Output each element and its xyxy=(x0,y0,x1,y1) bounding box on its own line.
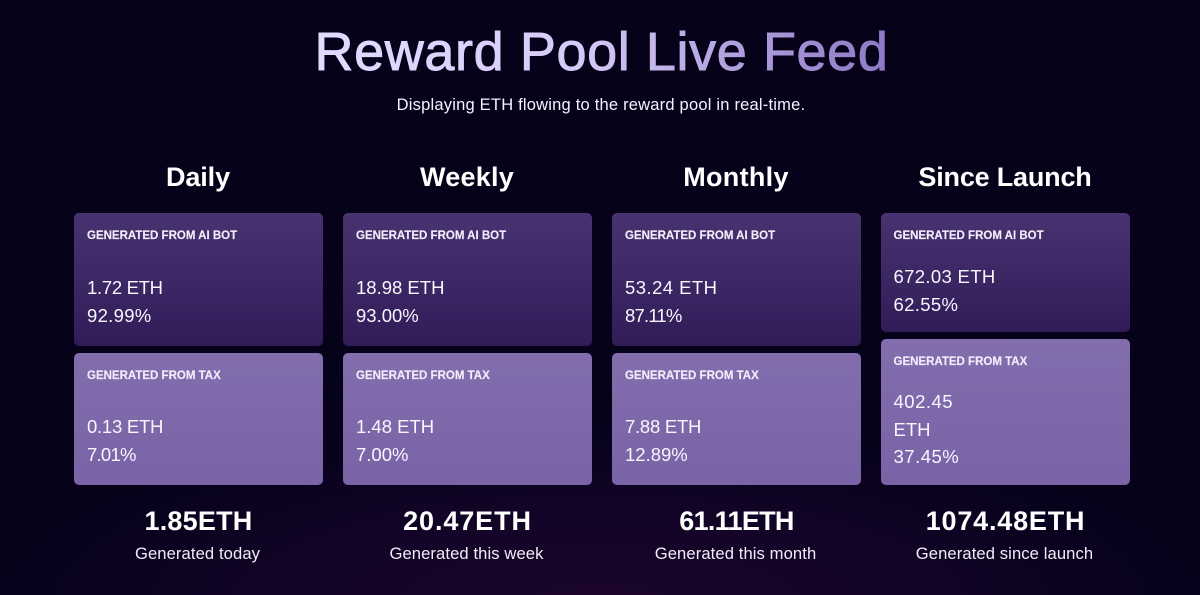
total: monthly: 61.11ETH xyxy=(679,506,794,536)
card: weekly tax: GENERATED FROM TAX xyxy=(356,370,490,382)
card: since launch AI bot: 672.03 ETH xyxy=(894,266,996,287)
card: monthly tax: GENERATED FROM TAX xyxy=(625,370,759,382)
total: daily: 1.85ETH xyxy=(145,506,252,536)
card: daily AI bot xyxy=(74,213,323,346)
heading: since launch: Since Launch xyxy=(918,162,1092,192)
panel: weekly xyxy=(343,162,592,563)
card: weekly tax: 7.00% xyxy=(356,444,408,464)
card: since launch tax: 37.45% xyxy=(894,446,959,467)
card: since launch AI bot: 62.55% xyxy=(894,294,958,314)
card: since launch AI bot xyxy=(881,213,1130,332)
caption: weekly: Generated this week xyxy=(389,544,544,563)
panel: daily xyxy=(74,162,323,563)
caption: daily: Generated today xyxy=(135,544,260,563)
card: since launch AI bot: GENERATED FROM AI BOT xyxy=(894,230,1044,242)
card: daily tax: 0.13 ETH xyxy=(87,416,163,437)
subtitle: Displaying ETH flowing to the reward pool in real-time. xyxy=(397,96,805,114)
total: since launch: 1074.48ETH xyxy=(926,506,1085,536)
title: Reward Pool Live Feed xyxy=(315,22,888,82)
card: weekly AI bot: 93.00% xyxy=(356,304,419,326)
card: daily AI bot: 1.72 ETH xyxy=(87,277,163,298)
card: monthly tax xyxy=(612,353,861,485)
card: weekly tax xyxy=(343,353,592,485)
card: daily AI bot: GENERATED FROM AI BOT xyxy=(87,230,237,242)
card: since launch tax xyxy=(881,339,1130,485)
card: since launch tax: ETH xyxy=(894,418,930,440)
card: weekly AI bot: GENERATED FROM AI BOT xyxy=(356,230,506,242)
caption: monthly: Generated this month xyxy=(655,544,816,563)
total: weekly: 20.47ETH xyxy=(403,506,532,536)
card: daily AI bot: 92.99% xyxy=(87,304,152,326)
card: weekly tax: 1.48 ETH xyxy=(356,416,434,437)
card: daily tax: 7.01% xyxy=(87,444,136,464)
heading: daily: Daily xyxy=(166,162,230,192)
card: monthly AI bot: 87.11% xyxy=(625,304,682,326)
panel: since launch xyxy=(881,162,1130,563)
card: daily tax xyxy=(74,353,323,485)
card: monthly tax: 12.89% xyxy=(625,444,688,464)
card: daily tax: GENERATED FROM TAX xyxy=(87,370,221,382)
card: since launch tax: GENERATED FROM TAX xyxy=(894,356,1027,368)
heading: monthly: Monthly xyxy=(683,162,789,192)
card: monthly tax: 7.88 ETH xyxy=(625,416,701,437)
heading: weekly: Weekly xyxy=(420,162,514,192)
caption: since launch: Generated since launch xyxy=(916,544,1093,563)
panel: monthly xyxy=(612,162,861,563)
card: monthly AI bot xyxy=(612,213,861,346)
card: weekly AI bot: 18.98 ETH xyxy=(356,277,444,298)
card: monthly AI bot: 53.24 ETH xyxy=(625,277,718,298)
card: monthly AI bot: GENERATED FROM AI BOT xyxy=(625,230,775,242)
card: weekly AI bot xyxy=(343,213,592,346)
card: since launch tax: 402.45 xyxy=(894,391,953,412)
